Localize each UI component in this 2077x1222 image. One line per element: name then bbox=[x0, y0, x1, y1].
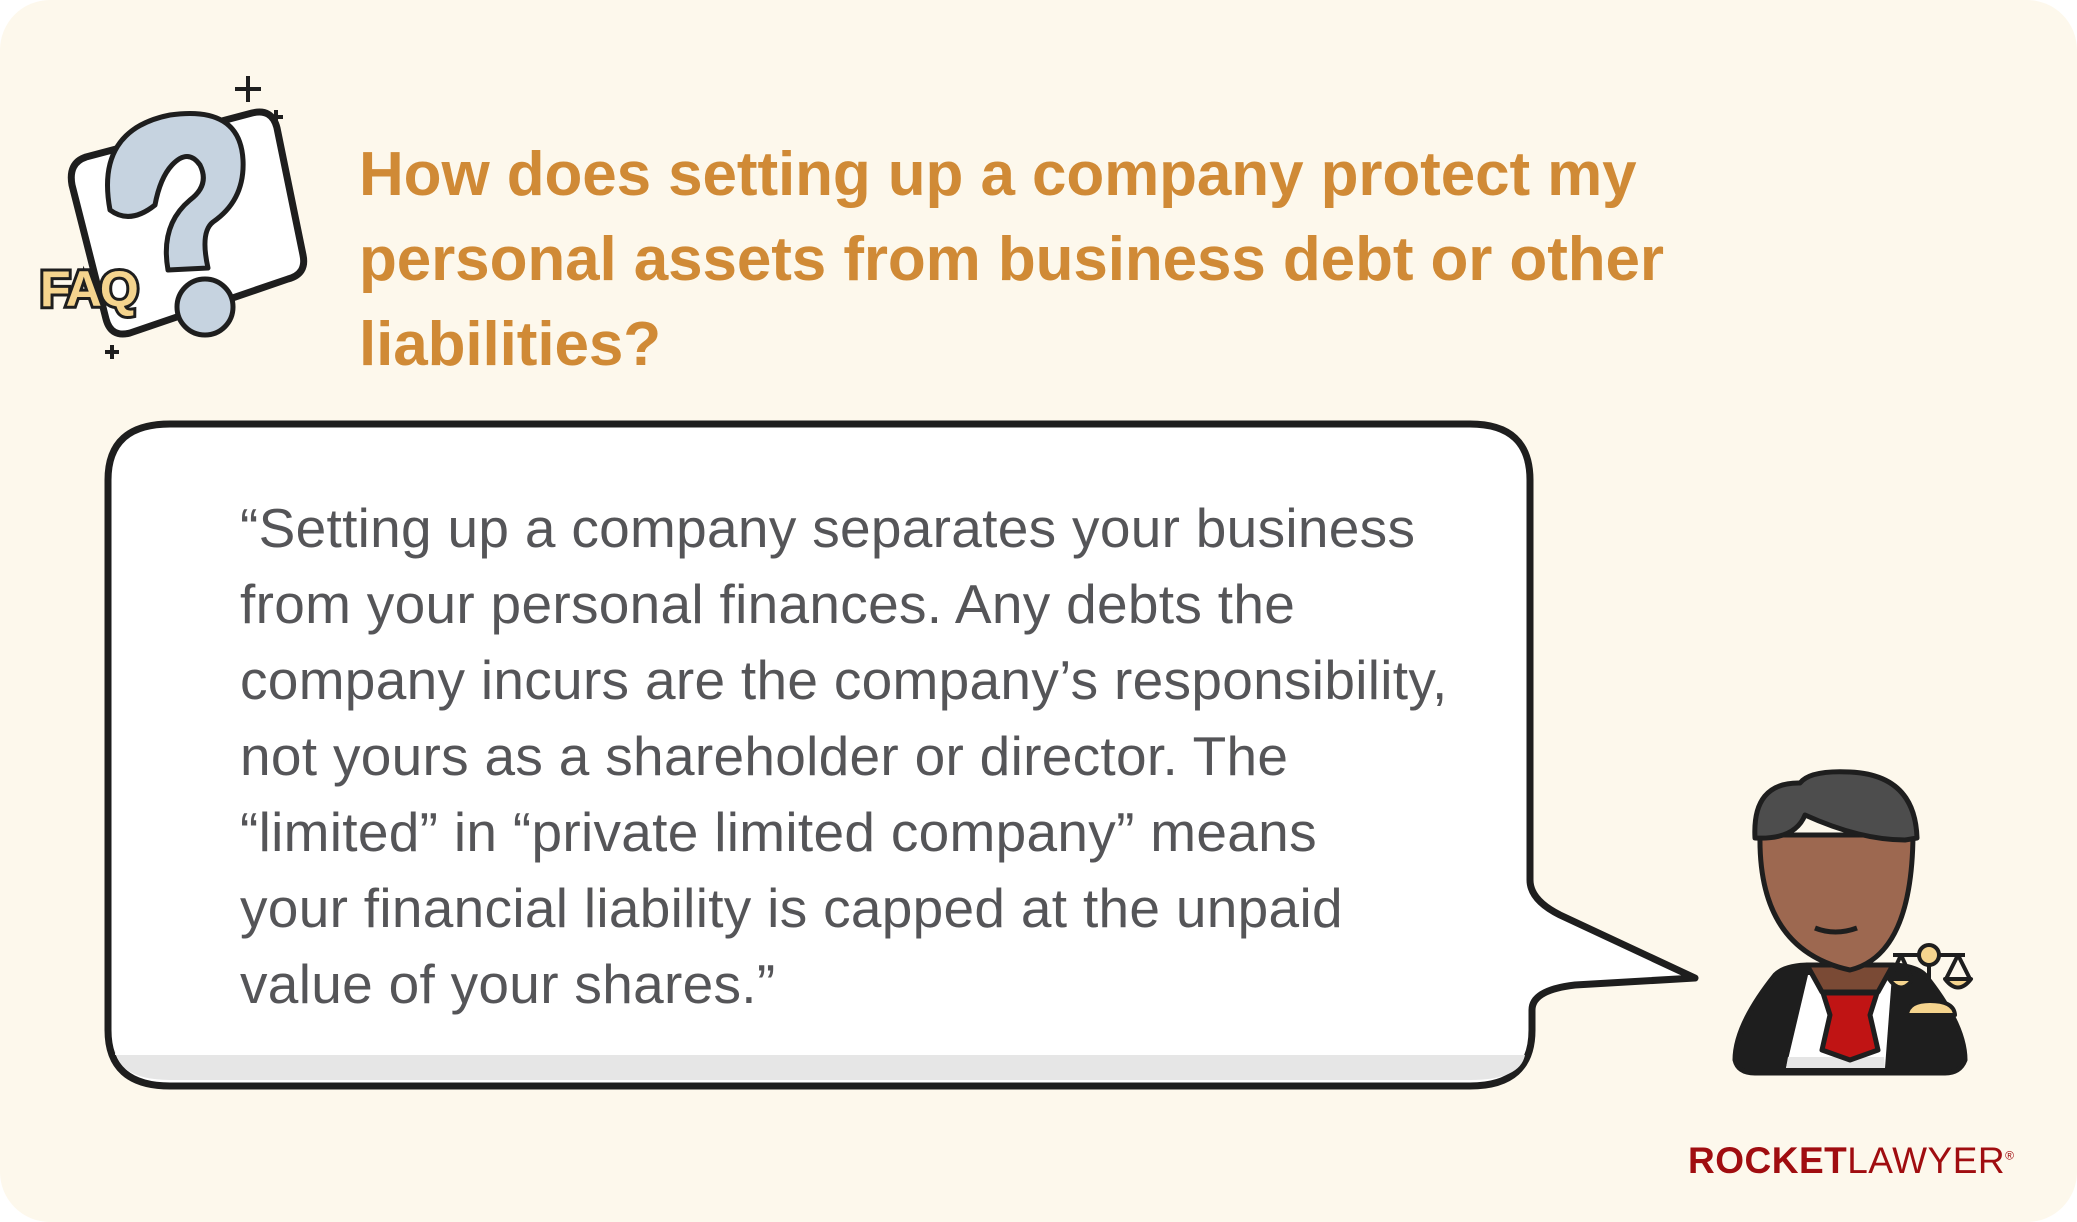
title: personal assets from business debt or other bbox=[359, 225, 1664, 294]
quote text bbox=[240, 497, 1448, 1015]
quote text: from your personal finances. Any debts the bbox=[240, 573, 1295, 635]
logo: ROCKETLAWYER® bbox=[1688, 1140, 2014, 1181]
FAQ label: FAQ bbox=[40, 261, 137, 317]
quote text: “Setting up a company separates your business bbox=[240, 497, 1415, 559]
quote text: “limited” in “private limited company” means bbox=[240, 801, 1317, 863]
title bbox=[359, 140, 1664, 379]
title: How does setting up a company protect my bbox=[359, 140, 1637, 209]
icon: lawyer with scales bbox=[1732, 769, 1974, 1076]
question mark bbox=[108, 113, 243, 270]
quote text: not yours as a shareholder or director. The bbox=[240, 725, 1288, 787]
title: liabilities? bbox=[359, 310, 661, 379]
scales bbox=[1889, 945, 1971, 1015]
card bbox=[71, 112, 304, 334]
icon: FAQ question card bbox=[40, 76, 308, 359]
quote text: value of your shares.” bbox=[240, 953, 775, 1015]
quote text: company incurs are the company’s responsibility, bbox=[240, 649, 1448, 711]
quote text: your financial liability is capped at the unpaid bbox=[240, 877, 1343, 939]
sparkles bbox=[105, 76, 283, 359]
